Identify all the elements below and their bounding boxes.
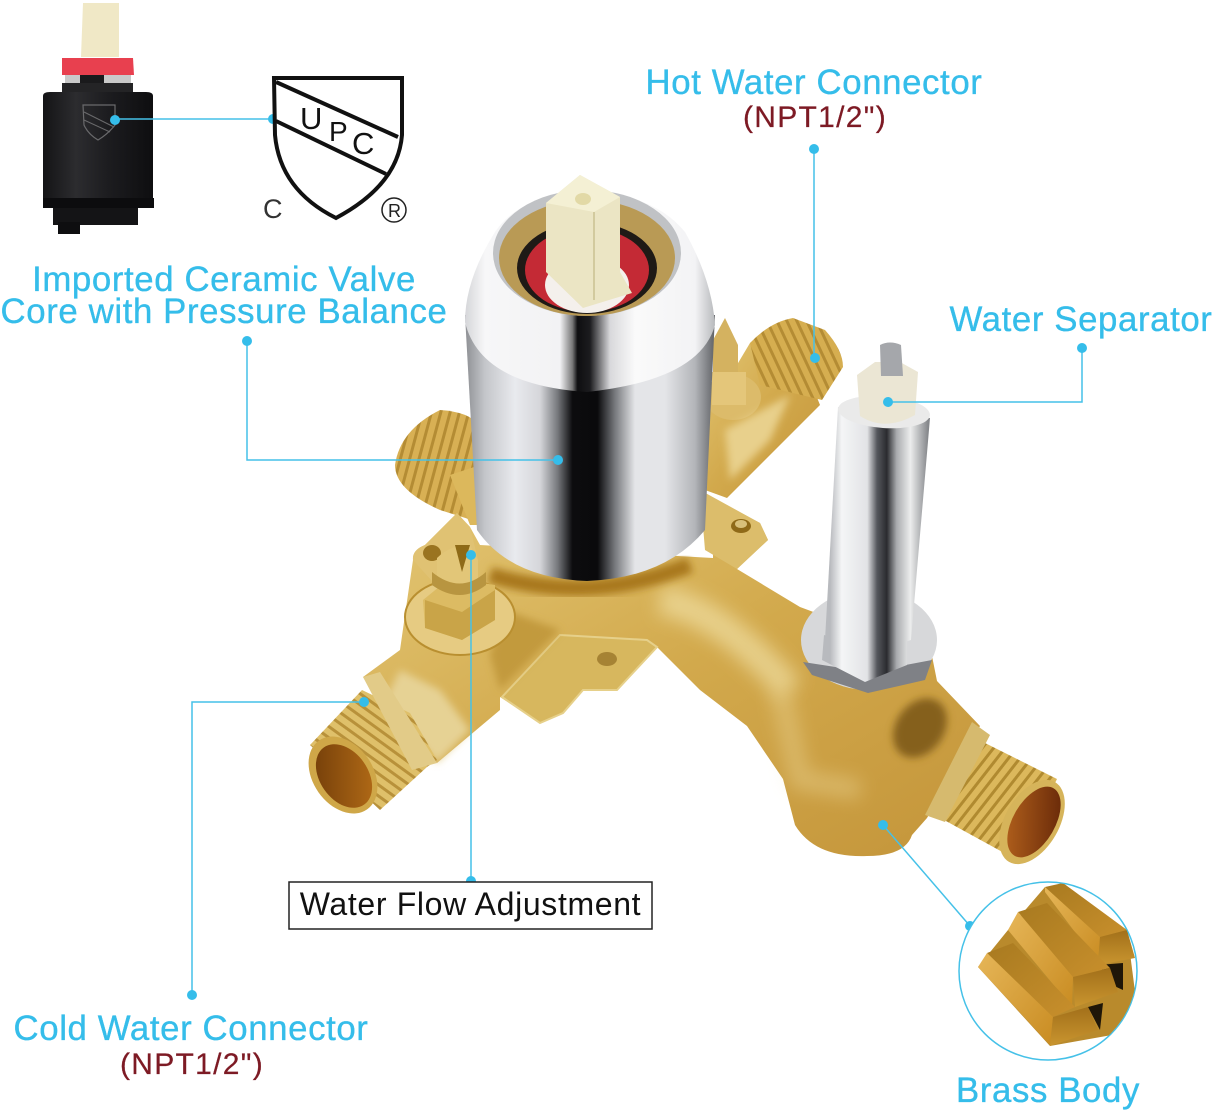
heading: ceramic valve core <box>1 260 447 331</box>
heading: hot water connector: Hot Water Connector <box>646 63 982 102</box>
connector: water separator callout <box>883 343 1087 407</box>
heading: brass body: Brass Body <box>956 1071 1140 1110</box>
icon: UPC certification shield: R <box>388 201 401 221</box>
connector: valve core callout <box>242 336 563 465</box>
icon: ceramic valve cartridge <box>43 3 154 234</box>
valve: outlet right <box>925 722 1078 875</box>
connector: cartridge to UPC badge <box>110 114 278 125</box>
connector: brass body callout <box>878 820 975 931</box>
icon: UPC certification shield: U <box>300 101 322 136</box>
connector: flow adjustment callout <box>466 550 476 886</box>
valve: water separator chrome stem <box>801 342 937 693</box>
heading: cold water connector <box>14 1009 368 1081</box>
valve: rear hot water inlet <box>705 318 843 498</box>
heading: ceramic valve core: Imported Ceramic Valve <box>32 260 416 299</box>
valve: chrome cylinder <box>465 175 715 581</box>
icon: UPC certification shield: C <box>263 194 282 224</box>
valve: flow adjustment screw <box>405 545 515 655</box>
connector: cold water callout <box>187 697 369 1000</box>
valve: left brass inlet <box>395 410 480 525</box>
label: water flow adjustment: Water Flow Adjustment <box>300 886 641 922</box>
icon: gold bars circle <box>959 882 1140 1060</box>
heading: hot water connector <box>646 63 982 134</box>
valve: brass body <box>363 490 980 856</box>
heading: ceramic valve core: Core with Pressure Balance <box>1 292 447 331</box>
heading: hot water connector: (NPT1/2") <box>743 101 887 134</box>
heading: cold water connector: Cold Water Connector <box>14 1009 368 1048</box>
icon: UPC certification shield: C <box>352 126 374 161</box>
valve: cold water inlet <box>294 672 437 827</box>
heading: water separator: Water Separator <box>950 300 1212 339</box>
connector: hot water callout <box>809 144 820 363</box>
icon: UPC certification shield: P <box>329 116 348 147</box>
heading: cold water connector: (NPT1/2") <box>120 1048 264 1081</box>
icon: UPC certification shield <box>263 78 406 224</box>
